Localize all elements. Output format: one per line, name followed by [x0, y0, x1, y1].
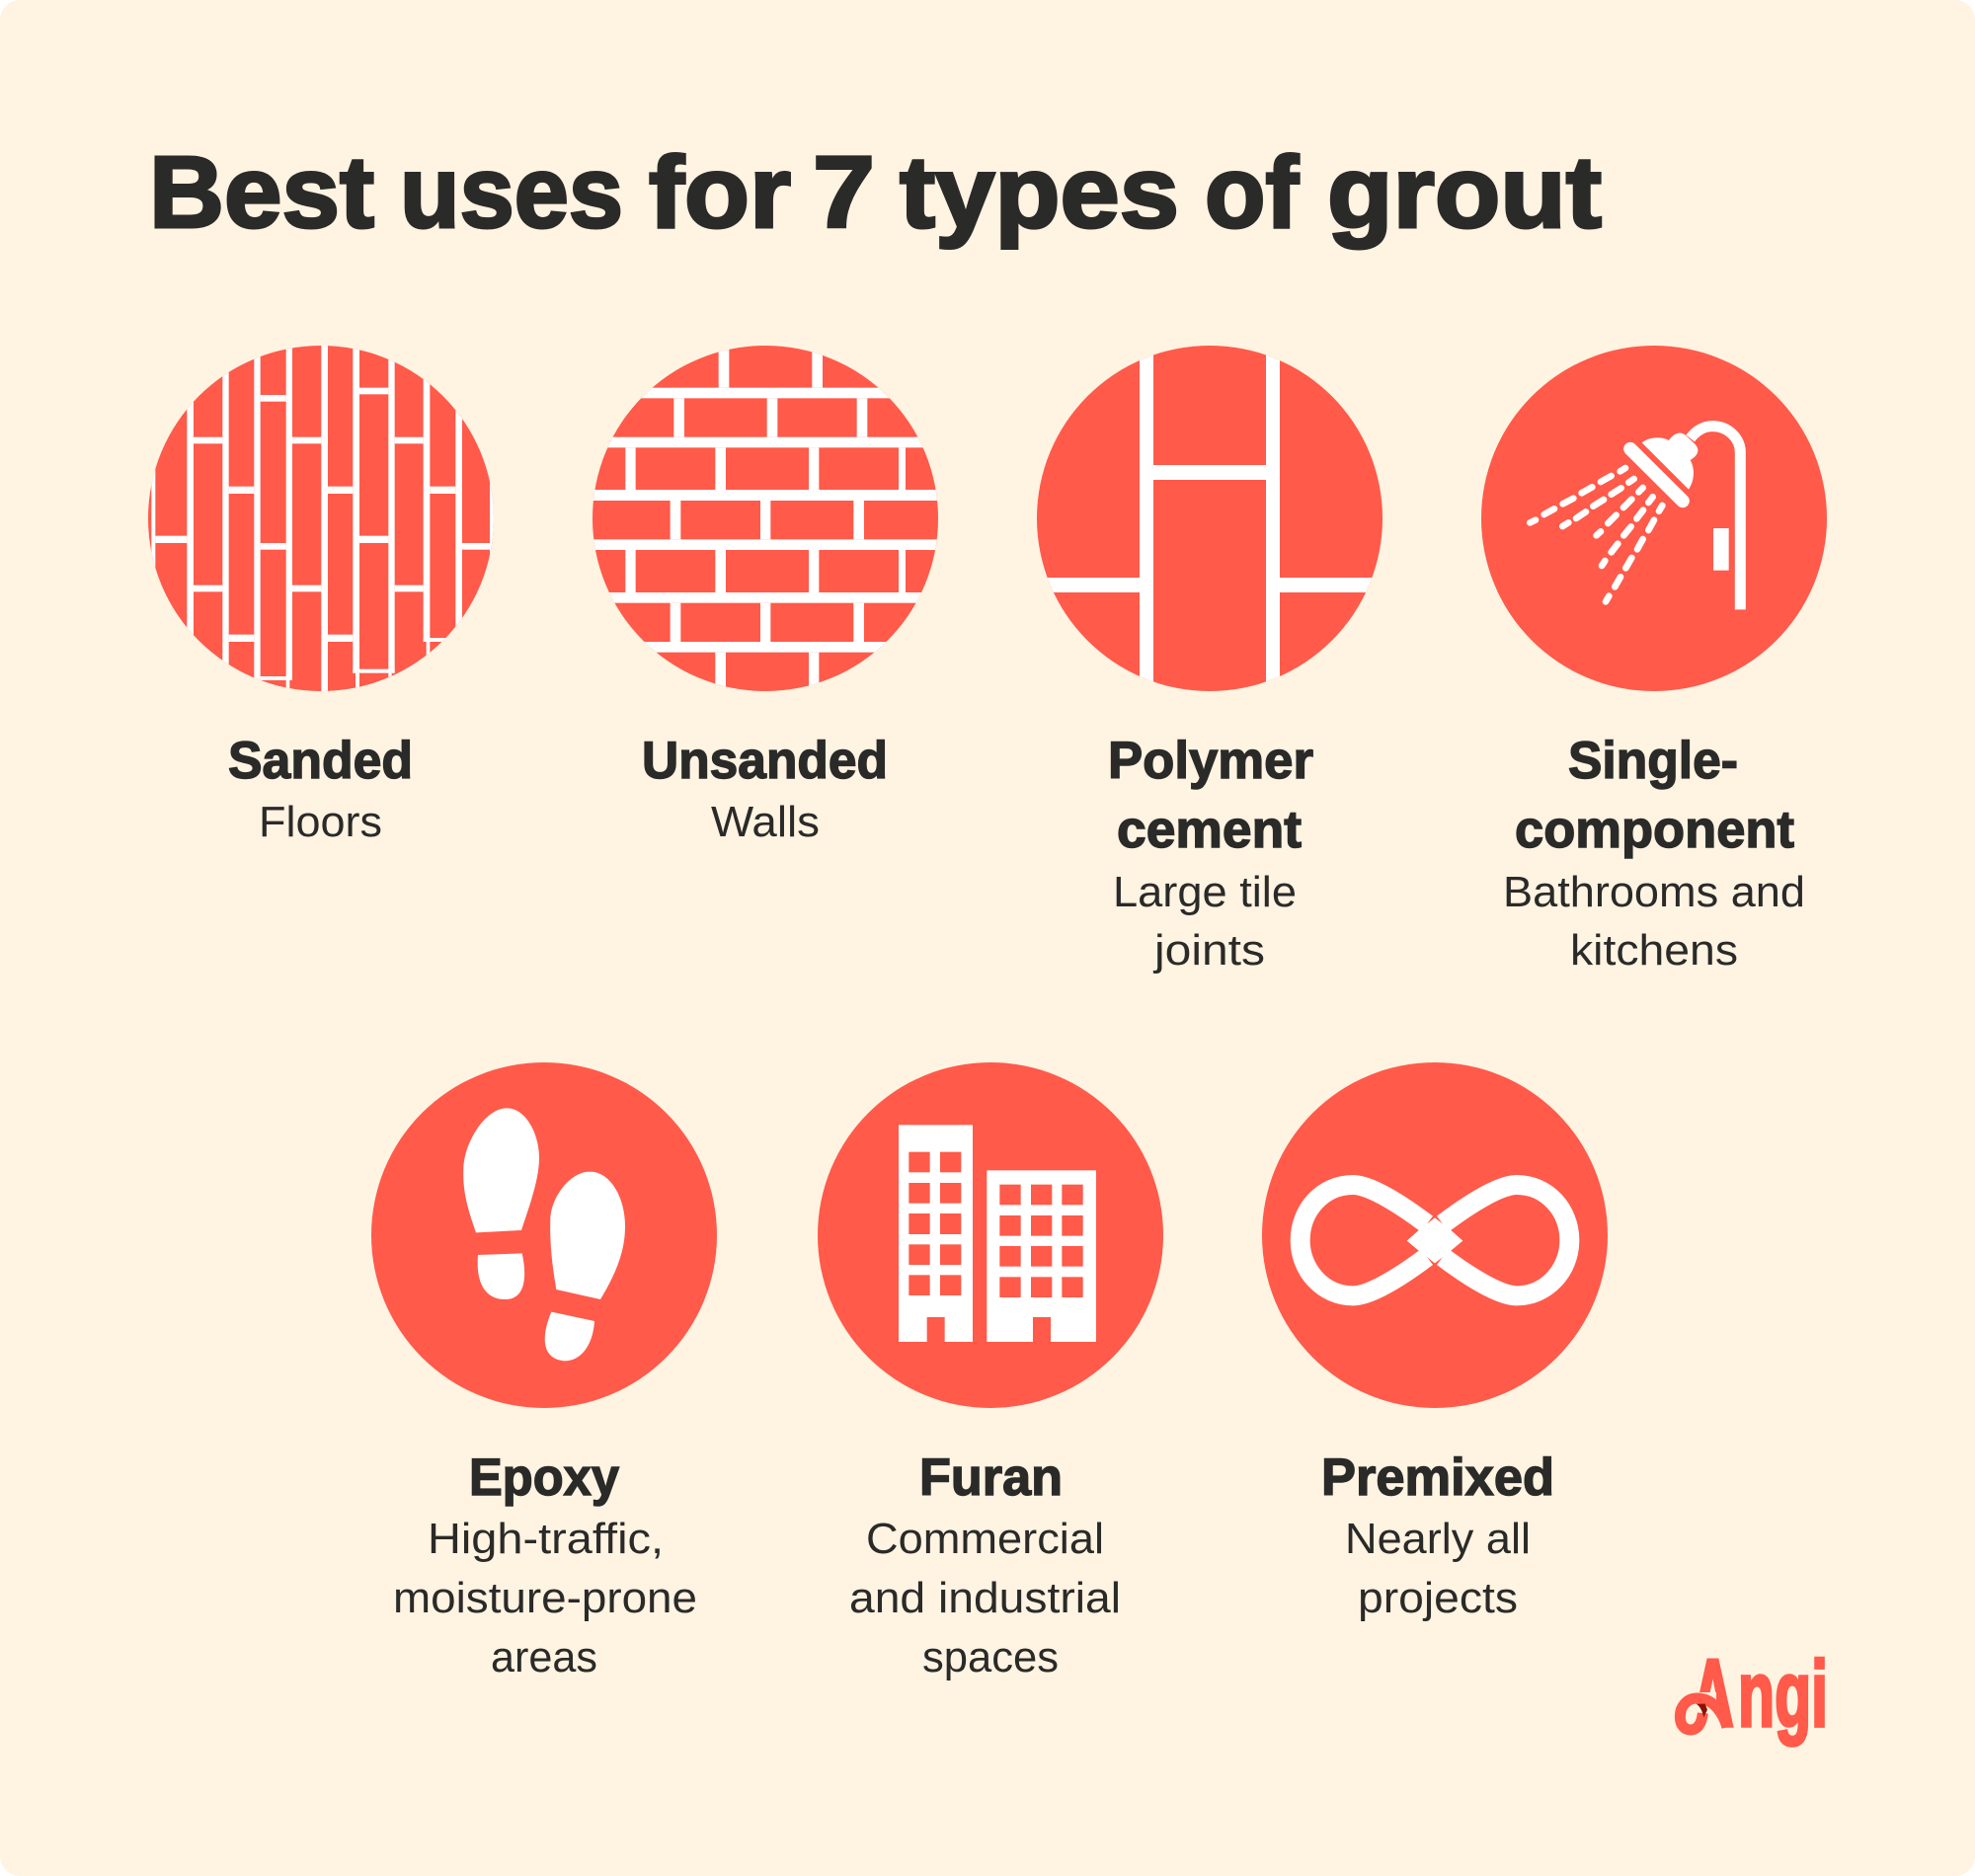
title: uses — [400, 135, 623, 249]
panel: furan: and industrial — [849, 1574, 1121, 1622]
title: 7 — [813, 135, 875, 249]
icon: footprints — [371, 1062, 717, 1408]
panel: single-component: kitchens — [1570, 926, 1738, 975]
logo: Angi — [1675, 1657, 1825, 1748]
label: Polymer cement: Polymer — [1108, 732, 1313, 790]
panel: polymer cement: joints — [1152, 926, 1265, 975]
label: Epoxy: Epoxy — [469, 1448, 619, 1507]
use: Nearly all projects: Nearly all — [1345, 1515, 1531, 1563]
panel: polymer cement — [1037, 346, 1382, 975]
panel: polymer cement: cement — [1117, 801, 1302, 859]
panel: furan — [818, 1062, 1163, 1681]
title: Best — [149, 135, 374, 249]
panel: sanded — [148, 346, 494, 846]
panel: single-component: component — [1515, 801, 1794, 859]
icon: vertical planks — [148, 346, 494, 693]
label: Sanded: Sanded — [228, 732, 413, 790]
logo: Angi: ngi — [1738, 1642, 1828, 1747]
label: Furan: Furan — [919, 1448, 1063, 1507]
use: Walls: Walls — [711, 798, 820, 846]
label: Premixed: Premixed — [1321, 1448, 1554, 1507]
panel: premixed — [1262, 1062, 1608, 1622]
panel: epoxy: areas — [491, 1633, 597, 1681]
title — [149, 135, 1602, 249]
panel: unsanded — [592, 346, 938, 846]
title: types — [900, 135, 1179, 249]
use: Floors: Floors — [259, 798, 382, 846]
panel: epoxy — [371, 1062, 717, 1681]
panel: single-component — [1481, 346, 1827, 975]
title: grout — [1327, 135, 1602, 249]
label: Single-component: Single- — [1568, 732, 1738, 790]
use: Large tile joints: Large tile — [1113, 868, 1297, 916]
icon: shower — [1481, 346, 1827, 691]
icon: brick wall — [592, 346, 938, 691]
panel: epoxy: moisture-prone — [393, 1574, 697, 1622]
use: Commercial and industrial spaces: Commercial — [866, 1515, 1104, 1563]
title: for — [649, 135, 791, 249]
icon: buildings — [818, 1062, 1163, 1408]
panel: premixed: projects — [1358, 1574, 1518, 1622]
icon: infinity — [1262, 1062, 1608, 1408]
panel: furan: spaces — [922, 1633, 1059, 1681]
icon: large tile joints — [1037, 346, 1382, 691]
title: of — [1205, 135, 1300, 249]
use: High-traffic, moisture-prone areas: High-traffic, — [428, 1515, 664, 1563]
label: Unsanded: Unsanded — [642, 732, 888, 790]
use: Bathrooms and kitchens: Bathrooms and — [1503, 868, 1805, 916]
logo: Angi: A — [1693, 1641, 1733, 1746]
